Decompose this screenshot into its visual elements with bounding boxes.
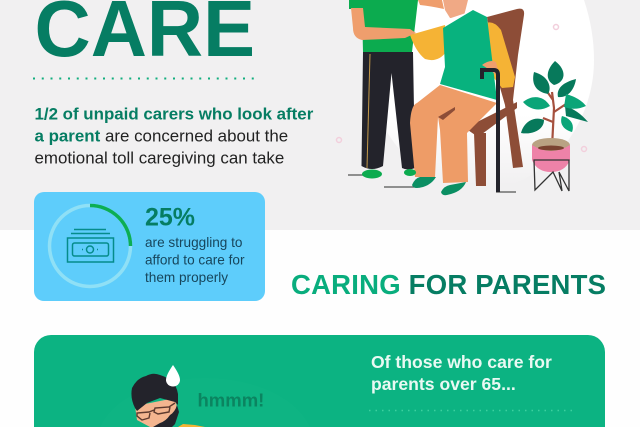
stat value: 25%: [145, 204, 195, 232]
hair: [131, 374, 178, 411]
parent shoes: [412, 177, 436, 188]
text block: carers statistic: a parent: [34, 126, 101, 146]
white circle behind illustration: [367, 0, 594, 190]
plant stem: [543, 90, 566, 147]
carer shoes: [362, 170, 382, 178]
parent hand: [482, 61, 500, 78]
sweat drop: [166, 365, 180, 386]
heading: caring for parents: CARING FOR PARENTS: [291, 269, 606, 300]
ground shadows: [348, 175, 516, 192]
text: of those who care: parents over 65...: [371, 374, 516, 394]
carer arm: [351, 8, 416, 40]
text block: carers statistic: are concerned about the: [105, 126, 288, 146]
plant stand: [534, 160, 569, 191]
walking cane: [482, 70, 498, 192]
text: of those who care: Of those who care for: [371, 352, 552, 372]
parent vest: [440, 10, 497, 100]
beard: [153, 405, 179, 427]
progress ring: [50, 206, 130, 286]
small decorative circles: [336, 24, 586, 152]
stat description: afford to care for: [145, 252, 245, 268]
parent pants: [410, 85, 497, 183]
carer hand on head: [418, 0, 444, 9]
shirt: [178, 424, 205, 427]
parent head: [443, 0, 469, 18]
parent left sleeve: [410, 25, 446, 60]
soft background shape: [100, 378, 310, 427]
text block: carers statistic: emotional toll caregiving can take: [34, 148, 284, 168]
panel: parents over 65: [34, 335, 605, 427]
icon: banknotes: [68, 230, 114, 262]
plant soil and pot: [532, 138, 570, 152]
hmmm label: hmmm!: [198, 390, 264, 410]
glasses: [137, 403, 175, 420]
parent collar: [451, 11, 474, 26]
panel: header background: [0, 0, 640, 230]
stat description: them properly: [145, 270, 228, 285]
stat description: are struggling to: [145, 235, 242, 250]
text block: carers statistic: 1/2 of unpaid carers who look after: [34, 104, 314, 124]
chair: [465, 9, 524, 186]
illustration: worried man: [100, 365, 310, 427]
parent hair: [465, 0, 475, 12]
seat side piece: [438, 107, 455, 120]
carer trousers: [362, 52, 415, 170]
carer shirt: [349, 0, 418, 52]
parent right sleeve: [483, 22, 515, 88]
panel: 25% statistic card: [34, 192, 265, 301]
face: [135, 398, 178, 427]
dotted divider: [33, 78, 259, 80]
plant leaves: [521, 61, 588, 133]
dotted divider: green panel: [369, 410, 575, 412]
illustration: carer and elderly parent: [336, 0, 588, 195]
trouser stripe: [367, 54, 370, 168]
